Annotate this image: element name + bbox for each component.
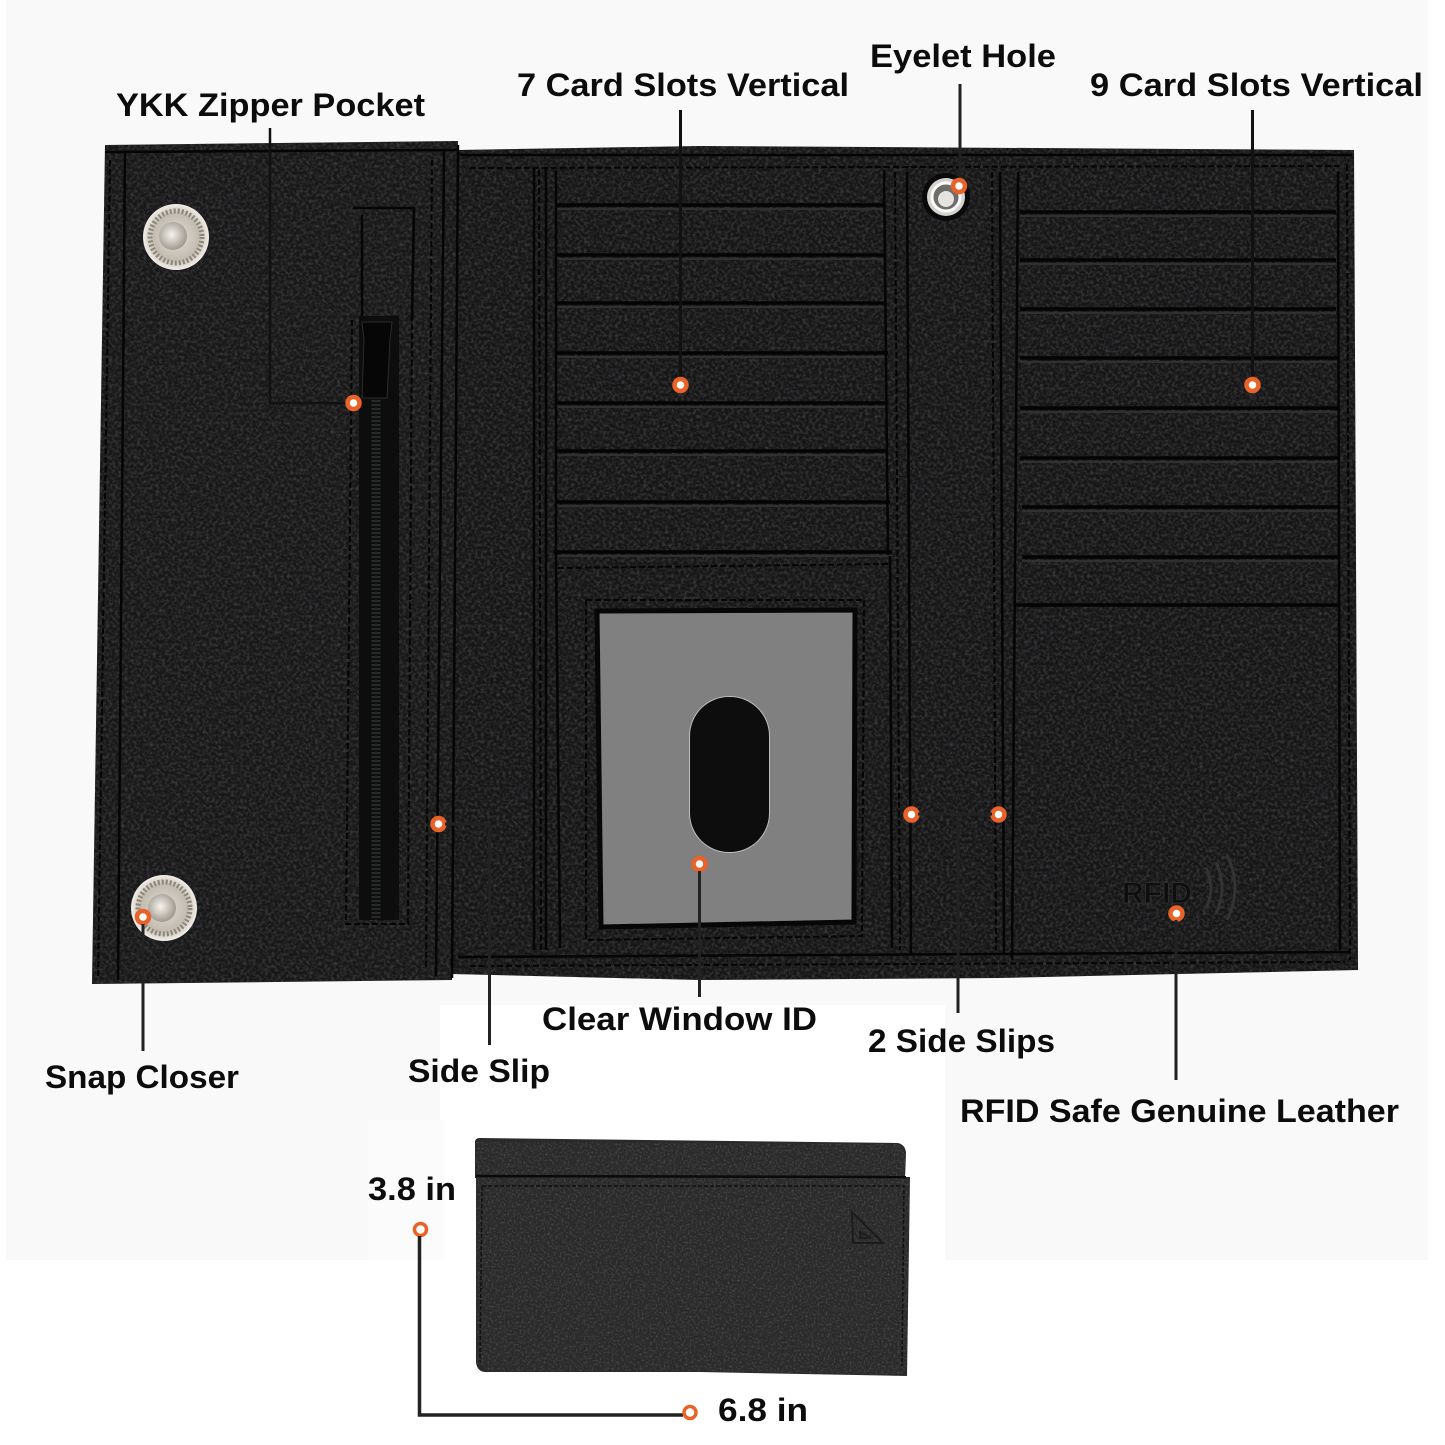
callout: Eyelet Hole: Eyelet Hole [870,38,1056,74]
callout: YKK Zipper Pocket: YKK Zipper Pocket [116,87,425,123]
RFID emboss: RFID [1122,877,1192,910]
callout: 9 Card Slots Vertical [1090,67,1423,391]
fold seams [458,155,1352,966]
callout: Snap Closer: Snap Closer [45,1059,239,1095]
eyelet [922,173,970,221]
callout: RFID Safe Genuine Leather [960,908,1399,1129]
dimension: 3.8 in height and 6.8 in width: 6.8 in [718,1392,808,1428]
leather grain [92,141,1358,984]
snap button top [143,204,209,270]
callout: 7 Card Slots Vertical [517,67,849,391]
7 card slots panel [554,170,911,955]
callout: 2 Side Slips [868,808,1055,1059]
logo emboss [852,1212,883,1243]
clear ID window [556,555,892,948]
callout: RFID Safe Genuine Leather: RFID Safe Genuine Leather [960,1093,1399,1129]
callout: 2 Side Slips: 2 Side Slips [868,1023,1055,1059]
callout: 7 Card Slots Vertical: 7 Card Slots Vertical [517,67,849,103]
9 card slots panel [1014,165,1350,960]
snap button bottom [131,875,197,941]
callout: Side Slip [408,818,550,1089]
closed wallet photo [475,1138,910,1376]
zipper pocket [346,208,414,924]
callout: Clear Window ID: Clear Window ID [542,1001,817,1037]
wallet body [452,146,1358,980]
callout: YKK Zipper Pocket [116,87,425,409]
front flap [476,1177,910,1376]
window cut-out [689,696,770,853]
side slip panel [534,168,546,950]
zipper pull [362,322,392,398]
callout: Side Slip: Side Slip [408,1053,550,1089]
RFID emboss [1122,855,1235,920]
left flap [92,141,458,984]
two side slips panel [992,172,1018,960]
closed wallet grain [476,1142,909,1375]
top fold [475,1138,906,1178]
callout: Snap Closer [45,911,239,1095]
dimension: 3.8 in height and 6.8 in width [368,1171,808,1428]
callout: Eyelet Hole [870,38,1056,192]
open wallet photo [92,141,1358,984]
callout: Clear Window ID [542,858,817,1037]
dimension: 3.8 in height and 6.8 in width: 3.8 in [368,1171,456,1207]
callout: 9 Card Slots Vertical: 9 Card Slots Vertical [1090,67,1423,103]
left flap stitching and seams [98,145,458,980]
